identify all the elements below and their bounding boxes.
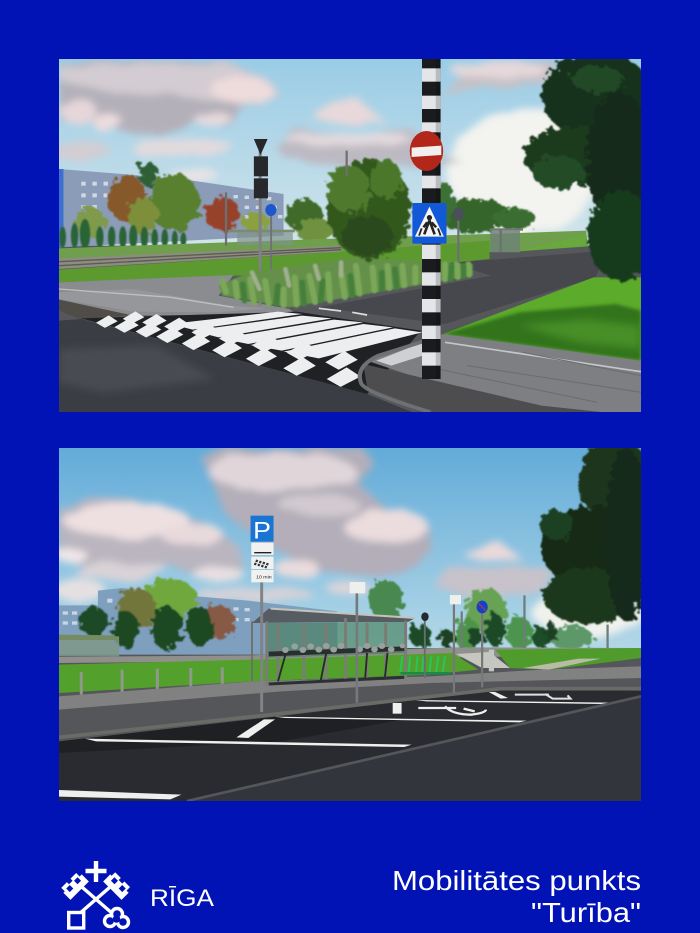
curb bbox=[360, 336, 441, 412]
title: Mobilitātes punkts Turība: Mobilitātes punkts bbox=[392, 865, 641, 896]
sky bbox=[59, 448, 641, 801]
parking sign with plates bbox=[251, 516, 274, 712]
green embankment bbox=[59, 653, 478, 693]
steps and lawn on right bbox=[456, 648, 641, 671]
bicycle racks bbox=[81, 667, 222, 695]
centre tree bbox=[327, 159, 411, 259]
logo: Riga crossed keys emblem with wordmark bbox=[61, 861, 214, 930]
clouds bbox=[52, 61, 597, 236]
trees in the background bbox=[76, 161, 536, 243]
grass embankment bbox=[59, 241, 490, 282]
striped black and white pole bbox=[422, 59, 441, 379]
right lawn bbox=[443, 277, 641, 361]
row of cypress trees bbox=[59, 219, 186, 249]
no entry sign bbox=[410, 131, 443, 171]
parking sign with plates: P bbox=[253, 518, 271, 544]
bottom asphalt road bbox=[59, 319, 412, 412]
parking lines bbox=[59, 692, 608, 799]
buildings in the background bbox=[59, 169, 284, 247]
small shelter on left bbox=[59, 635, 119, 656]
planted grasses bbox=[219, 257, 473, 307]
title: Mobilitātes punkts Turība: "Turība" bbox=[531, 897, 641, 928]
paved area left bbox=[59, 275, 297, 320]
disabled parking sign bbox=[350, 582, 365, 703]
ground base bbox=[59, 648, 641, 801]
right side road bbox=[319, 251, 608, 324]
pavement sidewalk bbox=[367, 334, 641, 412]
icon: cross above keys bbox=[86, 861, 106, 882]
panel: top photo, pedestrian crossing with pole and road signs bbox=[59, 59, 641, 412]
far green verge bbox=[59, 231, 588, 261]
road shade patches bbox=[59, 346, 215, 392]
green scooters bbox=[400, 656, 451, 673]
curb bbox=[59, 689, 641, 737]
ground base bbox=[59, 246, 641, 412]
tram tracks bbox=[59, 246, 341, 269]
buildings in the background bbox=[59, 588, 337, 655]
lamp posts bbox=[226, 151, 501, 262]
pavement bbox=[59, 666, 641, 737]
white plate post bbox=[450, 595, 461, 693]
traffic sign pole with yield and panels bbox=[254, 139, 268, 306]
trees in the background bbox=[78, 578, 593, 651]
right tree bbox=[523, 52, 655, 281]
bike shelter bbox=[252, 609, 415, 685]
clouds bbox=[50, 448, 645, 638]
blue round cycle sign bbox=[265, 204, 277, 271]
far round sign bbox=[453, 207, 464, 221]
large right tree bbox=[540, 440, 653, 625]
far right lawn and path bbox=[516, 234, 588, 252]
distant shelter bbox=[228, 228, 523, 252]
sky bbox=[59, 59, 641, 412]
distant rail strip bbox=[59, 647, 641, 663]
icon: crossed keys bbox=[58, 869, 134, 929]
crosswalk bbox=[81, 308, 422, 394]
parking sign with plates: 10 min bbox=[256, 575, 272, 581]
wordmark: RĪGA bbox=[150, 885, 214, 912]
cobblestone strip bbox=[363, 364, 601, 412]
small post sign with round top bbox=[421, 612, 429, 678]
title: Mobilitātes punkts Turība bbox=[392, 865, 641, 928]
lamp posts far bbox=[462, 595, 608, 648]
pedestrian crossing sign bbox=[412, 203, 447, 244]
parking area bricks bbox=[59, 690, 641, 801]
panel: bottom photo, parking area and bicycle shelter bbox=[59, 448, 641, 801]
shadow across parking bbox=[59, 716, 412, 753]
road surface bbox=[189, 697, 641, 801]
blue round sign post bbox=[477, 601, 488, 687]
